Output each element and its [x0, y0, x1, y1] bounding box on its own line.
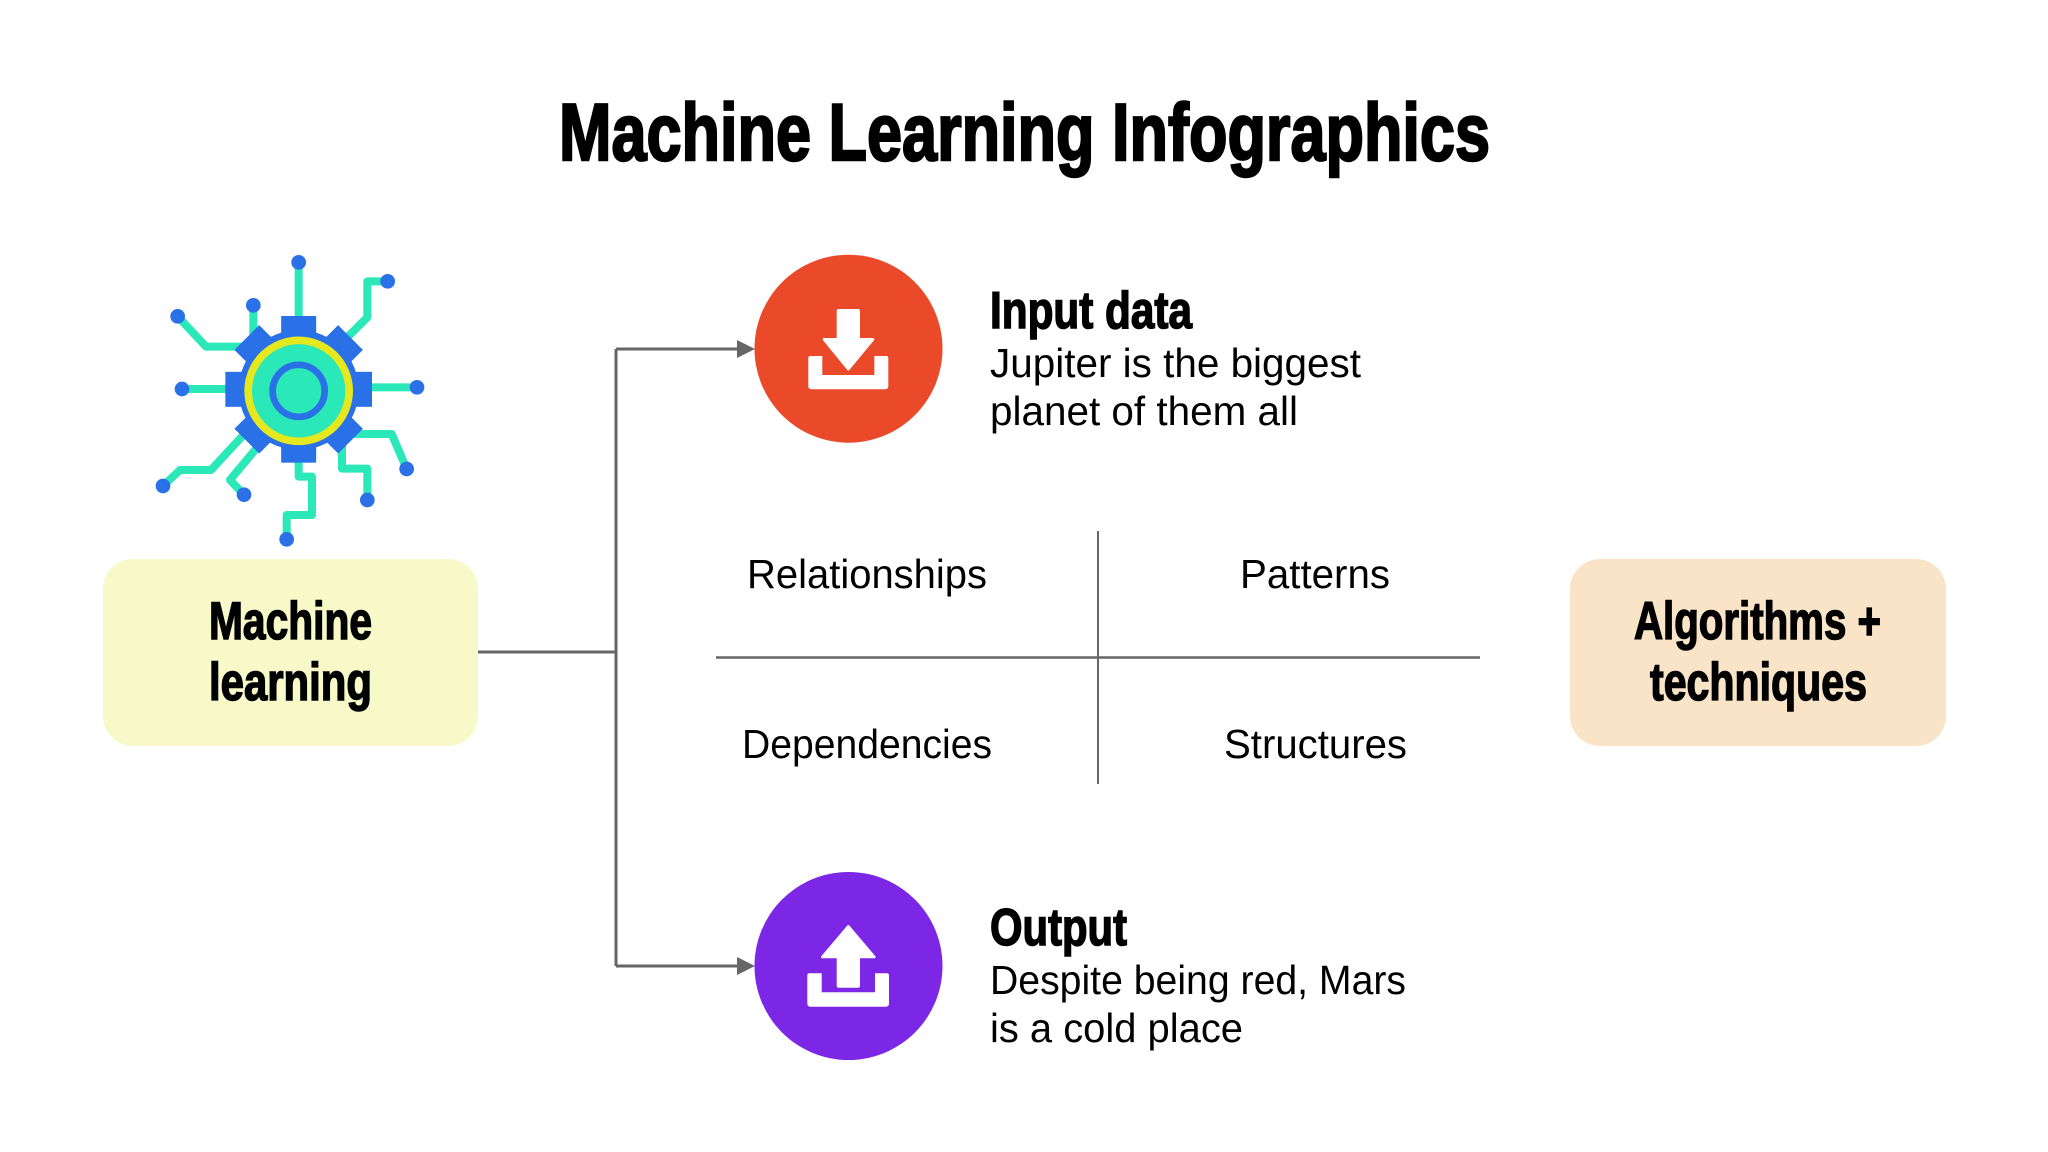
panel: algorithms and techniques box: [1570, 559, 1946, 746]
icon: output upload circle: [754, 872, 942, 1060]
title: Machine Learning Infographics: [559, 88, 1490, 178]
text block: input data: Input data: [990, 282, 1193, 340]
text block: input data: Jupiter is the biggest: [990, 340, 1362, 386]
icon: machine learning gear with circuit traces: [156, 255, 424, 547]
text block: output: Output: [990, 899, 1127, 957]
text block: output: Despite being red, Mars: [990, 957, 1406, 1003]
text block: input data: planet of them all: [990, 388, 1298, 434]
icon: input data download circle: [754, 255, 942, 443]
panel: machine learning box: [103, 559, 478, 746]
text block: output: is a cold place: [990, 1005, 1243, 1051]
label: patterns: Patterns: [1240, 551, 1390, 597]
label: structures: Structures: [1224, 721, 1407, 767]
text block: output: [990, 899, 1406, 1051]
label: relationships: Relationships: [747, 551, 987, 597]
label: dependencies: Dependencies: [742, 721, 992, 767]
panel: algorithms and techniques box: techniques: [1650, 653, 1867, 712]
arrow: branching connector to input and output: [478, 340, 755, 975]
panel: quadrant of concepts: [716, 531, 1480, 784]
label: machine learning: Machine: [209, 592, 372, 651]
label: algorithms + techniques: Algorithms +: [1634, 592, 1881, 651]
text block: input data: [990, 282, 1362, 434]
panel: machine learning box: learning: [209, 653, 372, 712]
